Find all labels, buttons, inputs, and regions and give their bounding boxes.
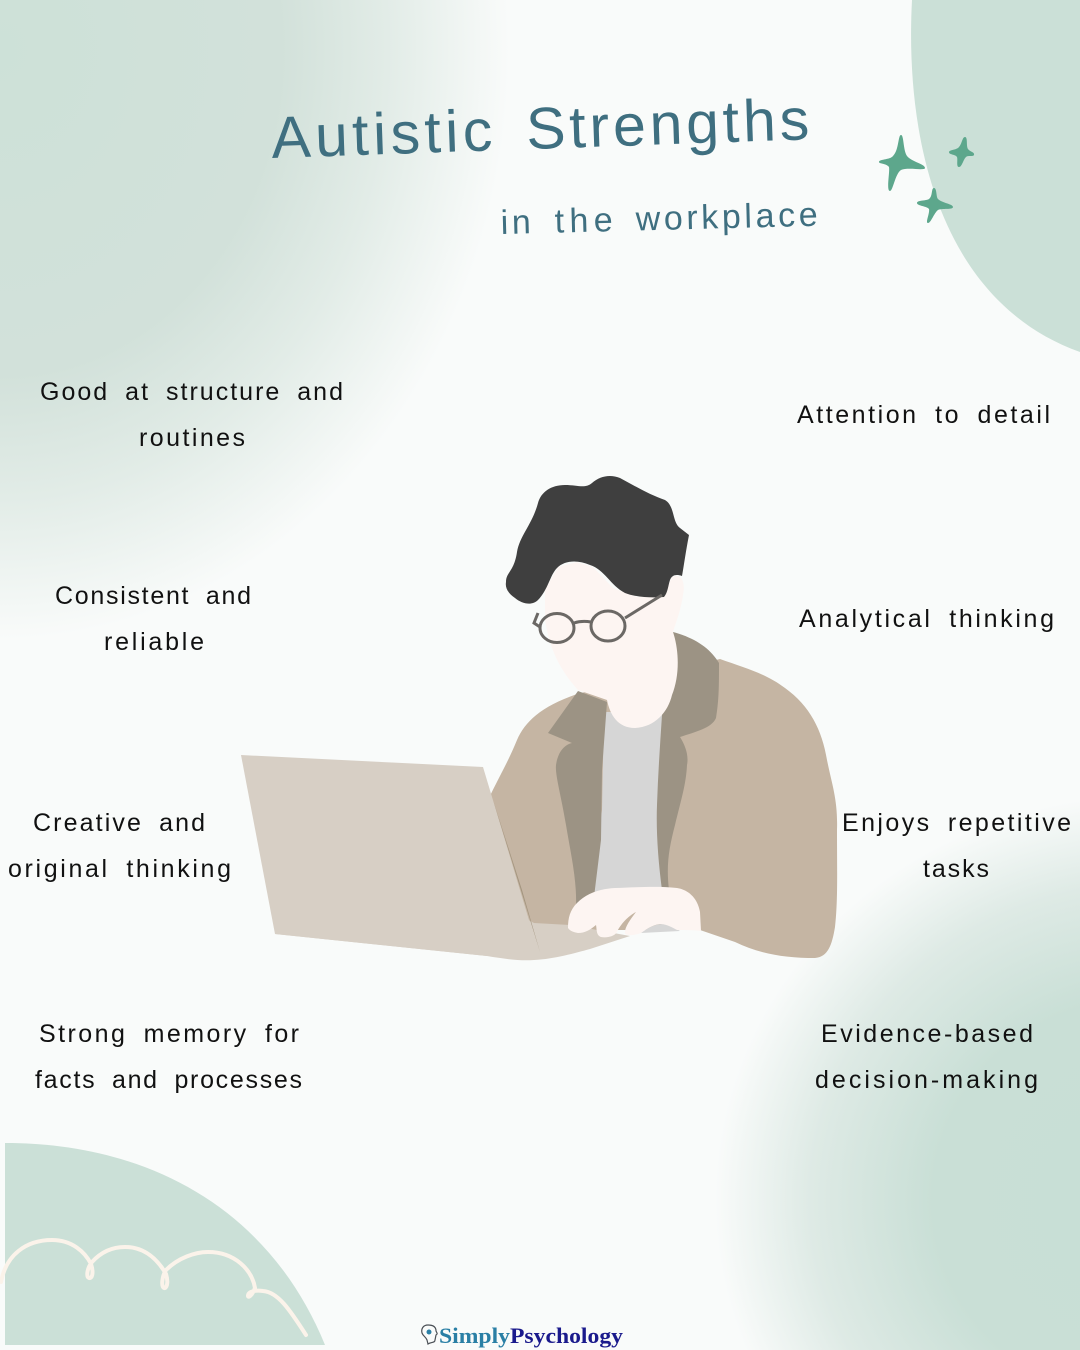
left lapel (548, 691, 607, 907)
label: Enjoys repetitive tasks: tasks (923, 855, 989, 883)
right lapel (657, 632, 719, 890)
label: Good at structure and routines: routines (139, 424, 245, 452)
icon: sparkles (879, 135, 974, 223)
label: Strong memory for facts and processes: Strong memory for (39, 1020, 299, 1048)
label: Attention to detail: Attention to detail (797, 401, 1050, 429)
label: Strong memory for facts and processes: facts and processes (35, 1066, 302, 1094)
label: Good at structure and routines (40, 378, 343, 452)
blob: bottom left (5, 1143, 325, 1345)
label: Consistent and reliable (55, 582, 251, 656)
subtitle: the (554, 201, 613, 241)
glasses (534, 595, 662, 642)
label: Evidence-based decision-making: Evidence-based (821, 1020, 1033, 1048)
cloud line decoration (1, 1240, 306, 1335)
title (270, 86, 810, 171)
subtitle: workplace (634, 196, 818, 238)
subtitle: in (500, 203, 531, 242)
title: Strengths (525, 86, 810, 162)
label: Creative and original thinking: Creative and (33, 809, 205, 837)
wordmark: SimplyPsychology (439, 1323, 623, 1348)
blob: top right (911, 0, 1080, 352)
label: Creative and original thinking (8, 809, 231, 883)
hand (568, 887, 701, 937)
illustration: person at laptop (241, 476, 837, 960)
logo (422, 1323, 623, 1348)
label: Strong memory for facts and processes (35, 1020, 302, 1094)
background glow: bottom right (710, 790, 1080, 1350)
label: Enjoys repetitive tasks: Enjoys repetitive (842, 809, 1071, 837)
label: Consistent and reliable: reliable (104, 628, 204, 656)
face and neck (545, 562, 684, 728)
label: Creative and original thinking: original thinking (8, 855, 231, 883)
jacket (488, 659, 837, 958)
label: Enjoys repetitive tasks (842, 809, 1071, 883)
label: Evidence-based decision-making (815, 1020, 1038, 1094)
label: Good at structure and routines: Good at structure and (40, 378, 343, 406)
subtitle (500, 196, 818, 242)
label: Evidence-based decision-making: decision-making (815, 1066, 1038, 1094)
icon: head (422, 1325, 437, 1344)
label: Analytical thinking: Analytical thinking (799, 605, 1054, 633)
shirt (590, 712, 669, 900)
title: Autistic (270, 97, 493, 171)
laptop screen edge (493, 800, 540, 952)
keyboard highlight (641, 924, 680, 933)
laptop base (275, 850, 630, 960)
hair (506, 476, 689, 604)
label: Consistent and reliable: Consistent and (55, 582, 251, 610)
laptop screen (241, 755, 538, 956)
background glow: top left (0, 0, 520, 650)
